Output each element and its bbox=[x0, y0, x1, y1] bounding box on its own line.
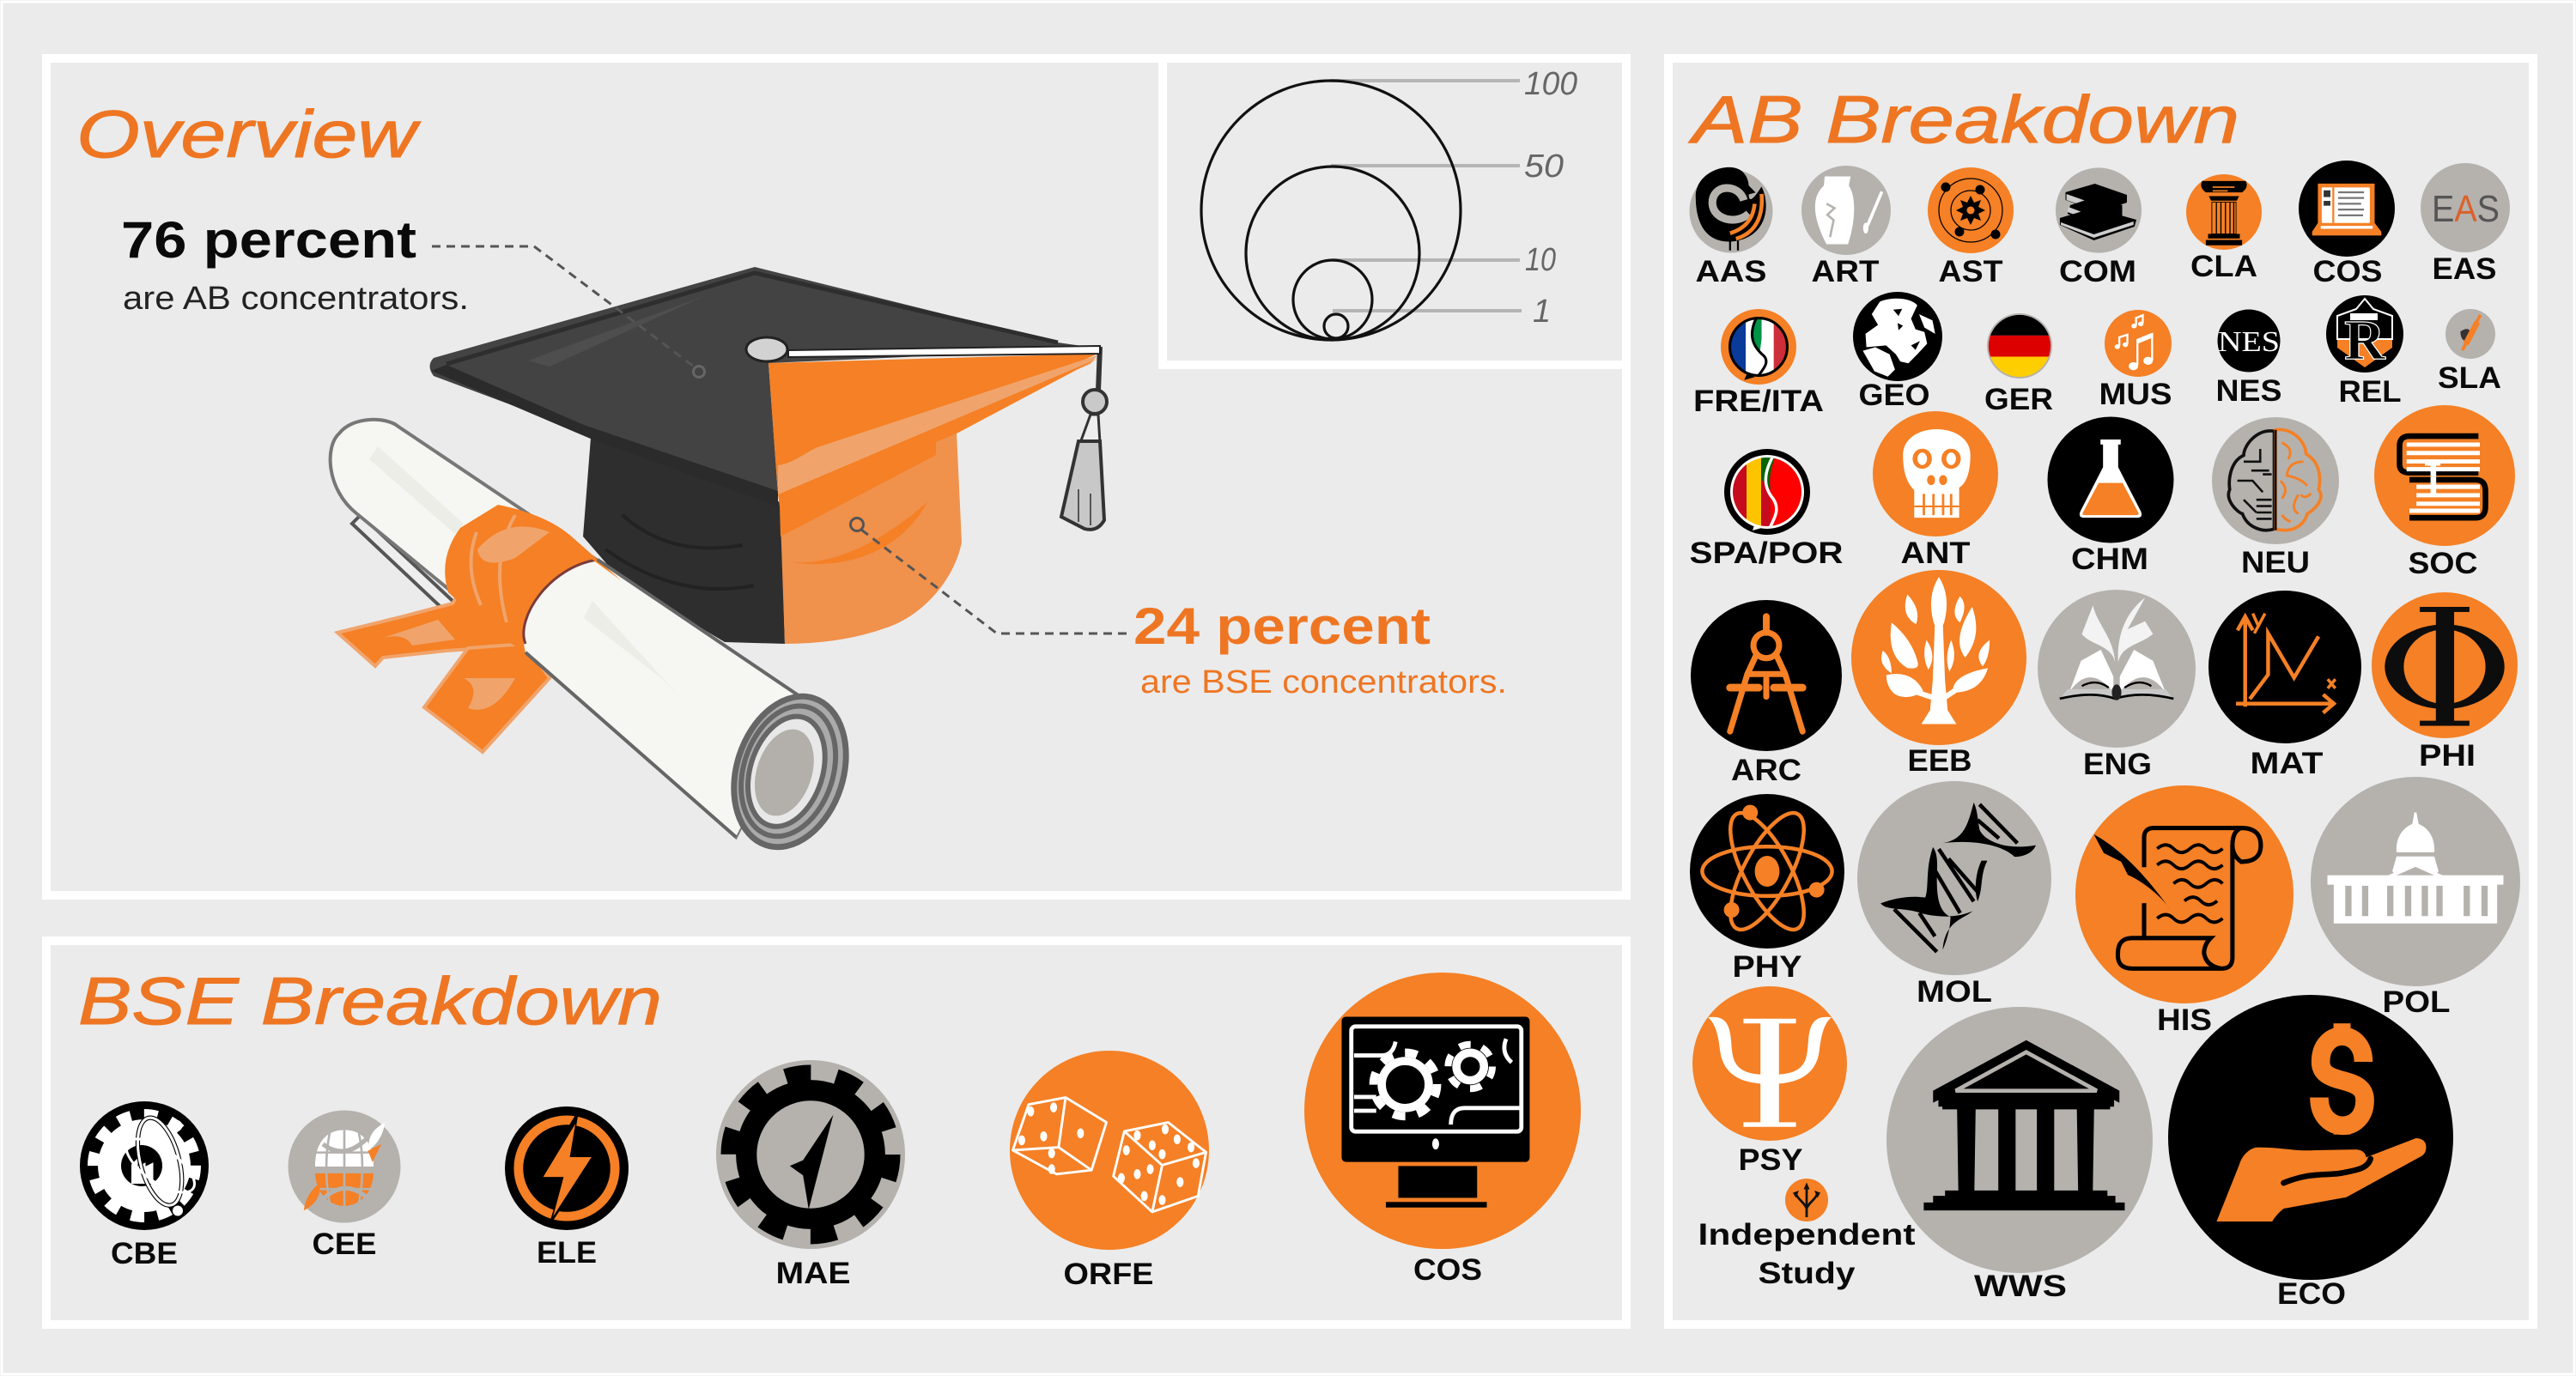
label: HIS: HIS bbox=[2157, 1003, 2212, 1037]
label: POL: POL bbox=[2382, 985, 2451, 1019]
scroll front section bbox=[524, 560, 805, 837]
AB: MAT bbox=[2208, 591, 2361, 780]
label: SLA: SLA bbox=[2438, 361, 2501, 395]
callout: 76 percent AB: 76 percent bbox=[121, 211, 416, 269]
label: PHY: PHY bbox=[1733, 950, 1801, 984]
AB: SOC bbox=[2374, 405, 2515, 580]
icon: COS monitor with gears bbox=[1304, 973, 1581, 1249]
icon: ART vase and brush bbox=[1801, 166, 1891, 255]
label: SOC: SOC bbox=[2408, 547, 2478, 580]
icon: HIS scroll and quill bbox=[2075, 785, 2293, 1003]
icon: CLA column bbox=[2186, 174, 2262, 250]
AB: AAS bbox=[1690, 167, 1772, 288]
AB: REL bbox=[2326, 295, 2403, 409]
label: CBE: CBE bbox=[111, 1237, 178, 1270]
icon: SOC book stack bbox=[2374, 405, 2515, 546]
AB: CHM bbox=[2047, 417, 2174, 576]
label: ENG: ENG bbox=[2083, 748, 2152, 781]
label: ANT: ANT bbox=[1901, 536, 1970, 570]
icon: EAS lettering bbox=[2421, 163, 2510, 252]
AB: GER bbox=[1984, 313, 2053, 416]
AB: EAS bbox=[2421, 163, 2510, 286]
callout: 76 percent AB: are AB concentrators. bbox=[123, 281, 469, 317]
BSE: ORFE bbox=[1010, 1051, 1209, 1291]
AB: ART bbox=[1801, 166, 1891, 288]
icon: CEE globe bbox=[289, 1111, 400, 1222]
cap button and strap bbox=[788, 346, 1100, 357]
AB: ANT bbox=[1873, 411, 1998, 570]
icon: EEB tree bbox=[1851, 570, 2026, 745]
AB: EEB bbox=[1851, 570, 2026, 778]
label: WWS: WWS bbox=[1974, 1270, 2067, 1303]
AB: NEU bbox=[2212, 417, 2339, 579]
callout: 24 percent BSE: 24 percent bbox=[1133, 597, 1431, 655]
icon: EAS lettering: EAS bbox=[2432, 188, 2500, 230]
icon: ELE lightning bbox=[505, 1106, 629, 1230]
label: MAT: MAT bbox=[2250, 747, 2324, 780]
scroll end rolls bbox=[715, 682, 865, 862]
icon: POL capitol bbox=[2311, 777, 2520, 986]
panel: size legend: 10 bbox=[1525, 242, 1556, 278]
icon: SLA rolling pin bbox=[2445, 309, 2495, 359]
icon: COS laptop bbox=[2299, 161, 2395, 257]
AB: FRE/ITA bbox=[1693, 309, 1824, 418]
icon: REL shield: R bbox=[2344, 309, 2386, 372]
AB: HIS bbox=[2075, 785, 2293, 1037]
cap body black half bbox=[583, 438, 785, 644]
panel: BSE breakdown bbox=[46, 941, 1626, 1324]
label: MOL: MOL bbox=[1917, 975, 1992, 1009]
dashed leader: BSE bbox=[850, 518, 1127, 633]
icon: GER flag bbox=[1987, 313, 2052, 379]
icon: NEU brain bbox=[2212, 417, 2339, 544]
panel: size legend bbox=[1163, 58, 1626, 365]
label: COS: COS bbox=[1413, 1253, 1482, 1287]
label: CLA: CLA bbox=[2190, 250, 2257, 283]
label: COM: COM bbox=[2059, 255, 2136, 288]
icon: MOL DNA helix bbox=[1857, 781, 2051, 975]
AB: PHI bbox=[2372, 592, 2518, 773]
callout: 24 percent BSE bbox=[1133, 597, 1507, 700]
label: NEU: NEU bbox=[2241, 546, 2310, 579]
ribbon tails bbox=[337, 592, 524, 666]
label: MUS: MUS bbox=[2099, 378, 2172, 411]
icon: AAS bird bbox=[1690, 167, 1772, 252]
AB: Independent Study bbox=[1698, 1179, 1916, 1290]
icon: FRE/ITA flags bbox=[1721, 309, 1796, 385]
AB: ECO bbox=[2168, 995, 2453, 1311]
label: EEB: EEB bbox=[1908, 744, 1971, 778]
AB: WWS bbox=[1886, 1007, 2153, 1303]
icon: AST solar system bbox=[1928, 167, 2014, 253]
label: Independent Study: Study bbox=[1759, 1257, 1856, 1290]
AB: SLA bbox=[2438, 309, 2501, 395]
AB: ENG bbox=[2038, 590, 2196, 781]
icon: ANT skull bbox=[1873, 411, 1998, 536]
label: AST: AST bbox=[1939, 255, 2002, 288]
AB: MOL bbox=[1857, 781, 2051, 1009]
label: PSY: PSY bbox=[1738, 1143, 1803, 1177]
icon: NES lettering: NES bbox=[2218, 326, 2280, 358]
icon: PHI symbol bbox=[2372, 592, 2518, 738]
heading: overview: Overview bbox=[76, 96, 422, 172]
label: ORFE: ORFE bbox=[1063, 1258, 1154, 1291]
label: AAS: AAS bbox=[1695, 255, 1767, 288]
AB: POL bbox=[2311, 777, 2520, 1019]
icon: ENG open book bbox=[2038, 590, 2196, 748]
BSE: MAE bbox=[716, 1060, 905, 1290]
icon: ECO hand and dollar bbox=[2168, 995, 2453, 1280]
BSE: COS bbox=[1304, 973, 1581, 1287]
heading: AB breakdown: AB Breakdown bbox=[1688, 82, 2239, 157]
icon: MAT graph bbox=[2208, 591, 2361, 743]
AB: CLA bbox=[2186, 174, 2262, 283]
label: MAE: MAE bbox=[776, 1257, 850, 1290]
label: FRE/ITA: FRE/ITA bbox=[1693, 385, 1824, 418]
label: ECO: ECO bbox=[2277, 1277, 2346, 1311]
BSE: CEE bbox=[289, 1111, 400, 1261]
label: CHM: CHM bbox=[2071, 543, 2148, 576]
icon: SPA/POR flags bbox=[1724, 449, 1810, 535]
AB: COM bbox=[2056, 167, 2142, 288]
icon: MAE gear and plane bbox=[716, 1060, 905, 1249]
label: EAS: EAS bbox=[2432, 252, 2497, 286]
icon: COM books bbox=[2056, 167, 2142, 253]
panel: size legend: 100 bbox=[1524, 66, 1577, 102]
AB: PHY bbox=[1690, 794, 1844, 984]
callout: 24 percent BSE: are BSE concentrators. bbox=[1140, 664, 1507, 700]
icon: WWS temple bbox=[1886, 1007, 2153, 1273]
cap board orange half bbox=[769, 354, 1098, 494]
panel: AB breakdown bbox=[1668, 58, 2533, 1324]
AB: SPA/POR bbox=[1690, 449, 1843, 570]
cap board black half bbox=[429, 267, 1100, 494]
label: ELE: ELE bbox=[537, 1236, 597, 1270]
diploma scroll illustration bbox=[331, 420, 865, 862]
AB: MUS bbox=[2099, 310, 2172, 411]
AB: COS bbox=[2299, 161, 2395, 288]
label: GEO: GEO bbox=[1858, 379, 1930, 412]
label: CEE: CEE bbox=[313, 1227, 376, 1261]
icon: CHM flask bbox=[2047, 417, 2174, 543]
BSE: ELE bbox=[505, 1106, 629, 1270]
AB: PSY bbox=[1692, 986, 1847, 1177]
BSE: CBE bbox=[80, 1101, 209, 1270]
label: REL: REL bbox=[2339, 375, 2401, 409]
icon: PHY atom bbox=[1690, 794, 1844, 949]
label: PHI: PHI bbox=[2419, 739, 2476, 773]
label: SPA/POR: SPA/POR bbox=[1690, 536, 1843, 570]
cap tassel bbox=[1061, 347, 1107, 530]
label: GER: GER bbox=[1984, 383, 2053, 416]
label: ART: ART bbox=[1812, 255, 1879, 288]
panel: overview bbox=[46, 58, 1626, 895]
icon: GEO globe bbox=[1853, 292, 1942, 381]
label: COS: COS bbox=[2313, 255, 2382, 288]
icon: CBE gear and atom bbox=[80, 1101, 209, 1230]
panel: size legend: 50 bbox=[1524, 149, 1564, 185]
AB: AST bbox=[1928, 167, 2014, 288]
callout: 76 percent AB bbox=[121, 211, 469, 317]
AB: NES bbox=[2215, 309, 2282, 408]
label: ARC: ARC bbox=[1731, 754, 1801, 787]
icon: PSY symbol bbox=[1692, 986, 1847, 1141]
label: Independent Study: Independent bbox=[1698, 1218, 1916, 1252]
panel: size legend: 1 bbox=[1533, 294, 1551, 330]
icon: MUS notes bbox=[2105, 310, 2172, 377]
dashed leader: AB bbox=[432, 246, 704, 378]
graduation cap illustration bbox=[429, 267, 1107, 644]
AB: ARC bbox=[1691, 600, 1842, 787]
label: Independent Study bbox=[1698, 1218, 1916, 1290]
icon: Independent Study arrows bbox=[1785, 1179, 1828, 1221]
ribbon band bbox=[445, 505, 621, 652]
icon: ORFE dice bbox=[1010, 1051, 1209, 1250]
icon: ARC compass bbox=[1691, 600, 1842, 751]
cap body orange half bbox=[780, 433, 962, 644]
heading: BSE breakdown: BSE Breakdown bbox=[78, 963, 662, 1039]
label: NES: NES bbox=[2215, 374, 2282, 408]
AB: GEO bbox=[1853, 292, 1942, 412]
